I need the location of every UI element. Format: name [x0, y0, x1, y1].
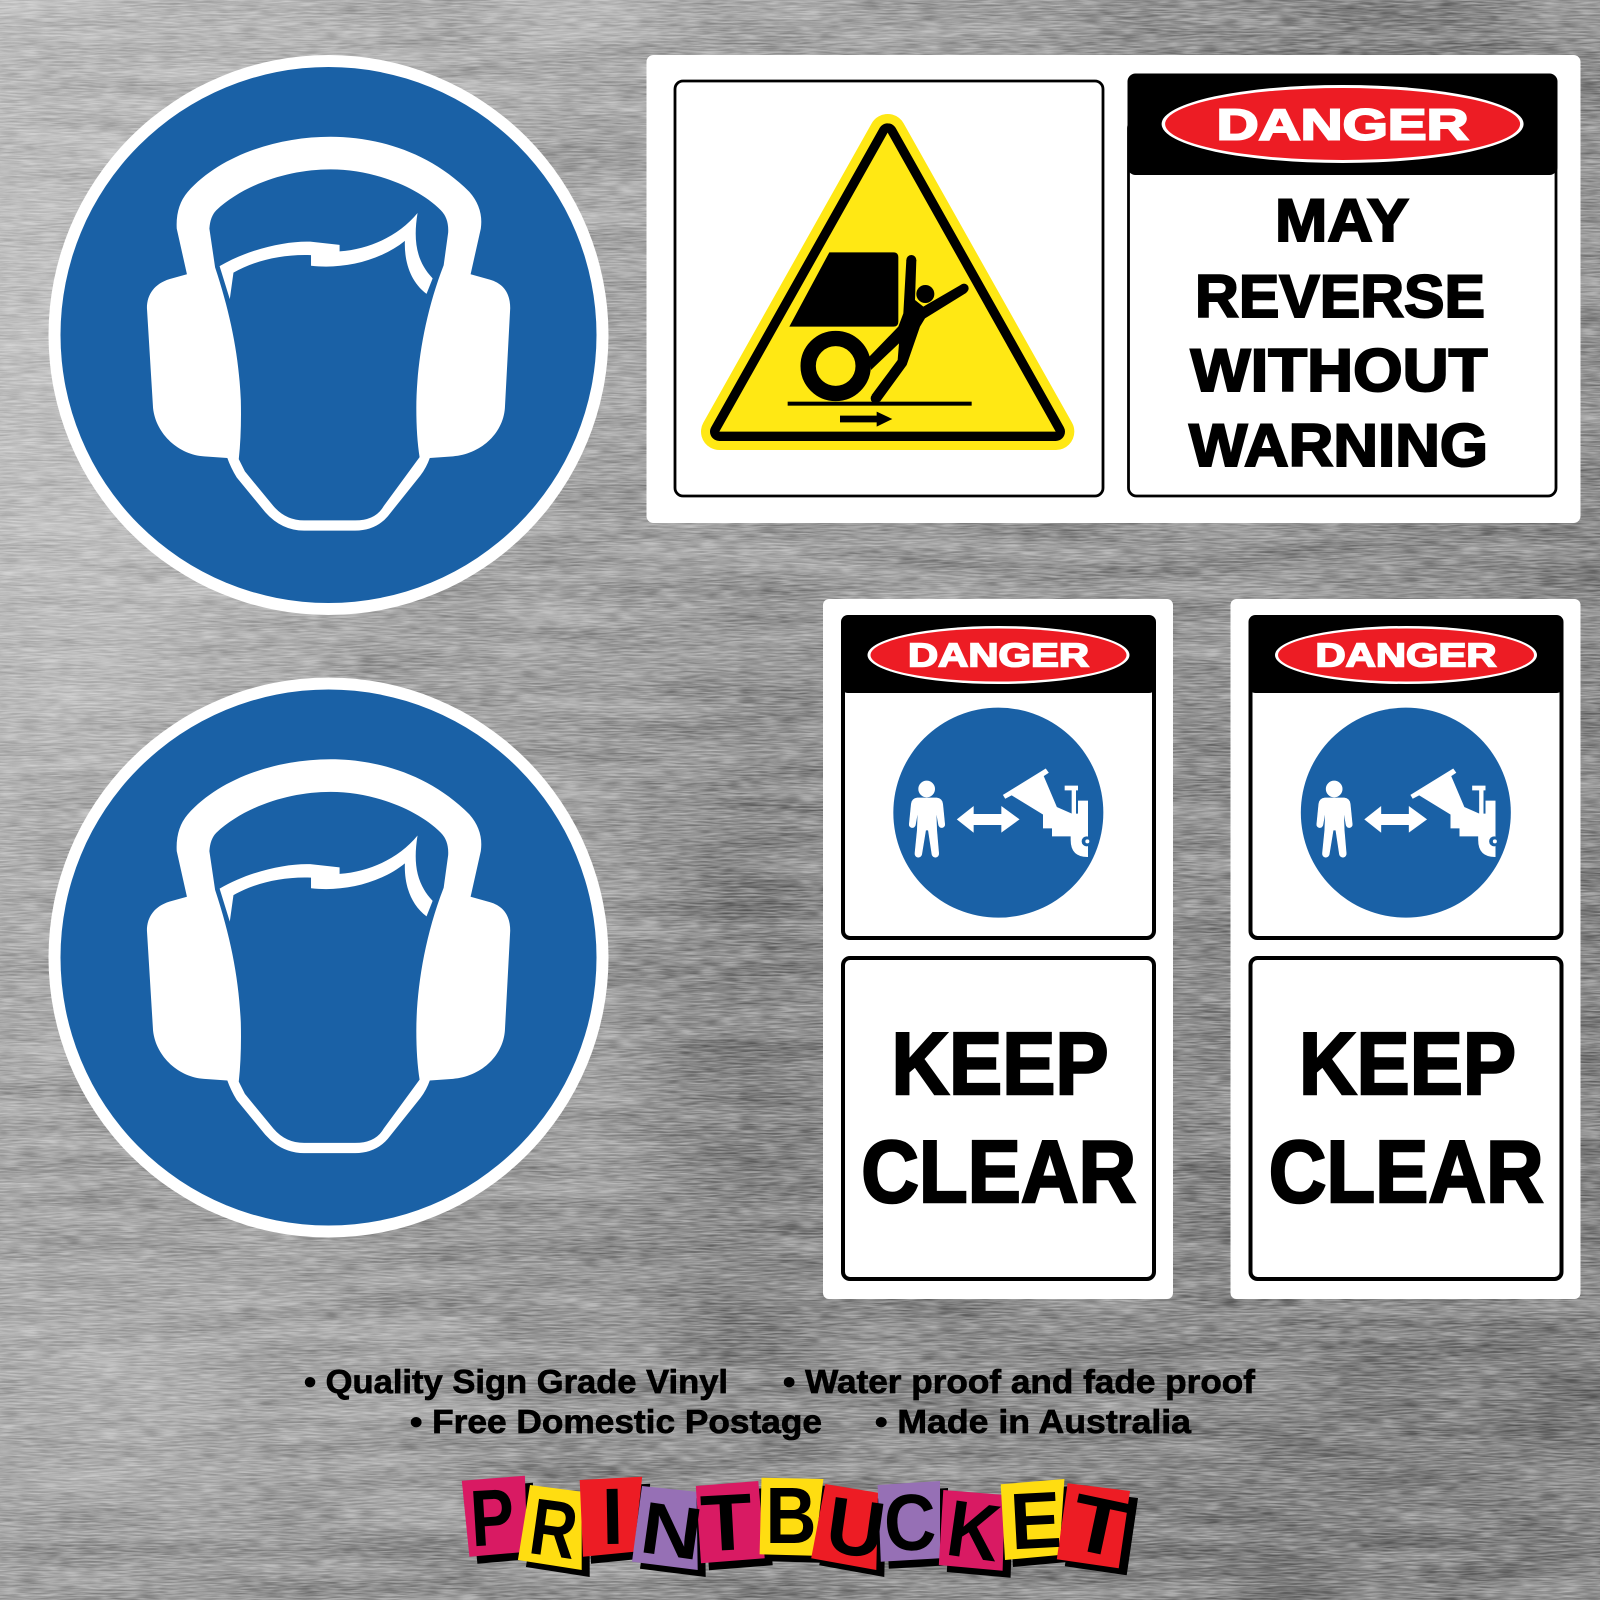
sign: keep clear right: [1230, 599, 1580, 1299]
feature list text: • Made in Australia: [875, 1403, 1192, 1440]
logo letters: B: [766, 1471, 816, 1560]
logo letters: P: [468, 1472, 517, 1564]
logo letters: N: [636, 1486, 707, 1576]
icon: keep distance from machine: [1301, 708, 1511, 918]
icon: ear muffs and head top: [147, 137, 510, 531]
danger header: DANGER: [1217, 100, 1469, 150]
logo: PrintBucket: [462, 1471, 1138, 1579]
sign text: may reverse without warning: MAY: [1275, 187, 1409, 254]
logo letters: R: [525, 1482, 583, 1577]
logo letters: [468, 1471, 1136, 1579]
sign text: may reverse without warning: WITHOUT: [1190, 337, 1488, 404]
feature list text: • Water proof and fade proof: [783, 1363, 1256, 1400]
sign text: may reverse without warning: REVERSE: [1195, 263, 1485, 330]
logo letters: C: [883, 1478, 938, 1569]
logo coloured tiles: [462, 1476, 1130, 1571]
icon: yellow warning triangle with run-over figure: [719, 132, 1056, 432]
feature list text: • Quality Sign Grade Vinyl: [304, 1363, 728, 1400]
sign: may reverse without warning: [646, 55, 1580, 523]
sign: keep clear left: [823, 599, 1173, 1299]
sign text: may reverse without warning: WARNING: [1189, 412, 1488, 479]
icon: ear muffs and head bottom: [147, 759, 510, 1153]
panel: keep clear text right: CLEAR: [1269, 1122, 1544, 1221]
danger header: [1128, 74, 1558, 175]
sign text: may reverse without warning: [1189, 187, 1488, 479]
panel: danger pictogram left: [841, 615, 1156, 938]
sticker: hearing protection circle top: [48, 55, 608, 615]
logo letters: U: [821, 1480, 891, 1576]
logo letters: I: [601, 1471, 624, 1562]
logo letters: E: [1008, 1474, 1063, 1567]
panel: keep clear text left: KEEP: [892, 1014, 1108, 1113]
panel: hazard pictogram: [675, 81, 1103, 496]
logo letters: T: [699, 1478, 755, 1569]
sticker: hearing protection circle bottom: [48, 678, 608, 1238]
logo letters: K: [942, 1484, 1006, 1579]
icon: keep distance from machine: [893, 708, 1103, 918]
panel: danger pictogram left: DANGER: [908, 636, 1089, 674]
panel: danger pictogram right: DANGER: [1316, 636, 1497, 674]
logo tile shadows: [470, 1483, 1138, 1578]
panel: keep clear text right: KEEP: [1299, 1014, 1516, 1113]
panel: keep clear text right: [1250, 958, 1562, 1279]
feature list text: • Free Domestic Postage: [410, 1403, 822, 1440]
panel: keep clear text left: CLEAR: [861, 1122, 1136, 1221]
panel: danger text: [1128, 74, 1558, 496]
panel: keep clear text left: [843, 958, 1154, 1279]
logo letters: T: [1063, 1477, 1136, 1576]
panel: danger pictogram right: [1248, 615, 1564, 938]
feature list text: [304, 1363, 1256, 1440]
